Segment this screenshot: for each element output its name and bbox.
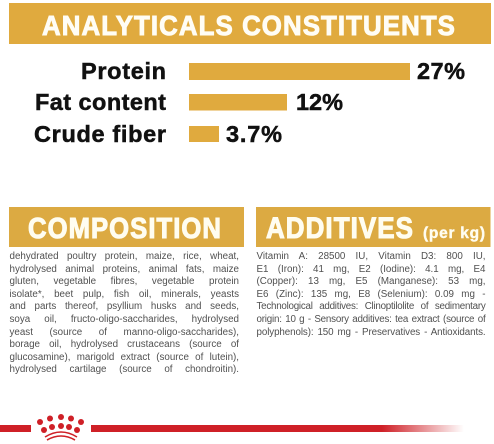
composition text: hydrolysed animal proteins, animal fats, maize [10, 264, 239, 275]
additives text: Technological additives: Clinoptilolite of sedimentary [256, 301, 486, 312]
additives text: E1 (Iron): 41 mg, E2 (Iodine): 4.1 mg, E4 [256, 264, 486, 275]
composition banner: COMPOSITION [28, 213, 222, 245]
additives text: polyphenols): 150 mg - Preservatives - Antioxidants. [256, 327, 486, 338]
row: crude fiber: 3.7% [226, 121, 282, 147]
additives text [256, 251, 486, 338]
red footer line [0, 425, 464, 432]
row: protein [81, 58, 465, 84]
row: fat content [35, 89, 343, 115]
additives text: E6 (Zinc): 135 mg, E8 (Selenium): 0.09 mg - [256, 289, 486, 300]
row: fat content: Fat content [35, 89, 166, 115]
additives banner [256, 207, 490, 247]
title banner: ANALYTICALS CONSTITUENTS [42, 10, 456, 41]
row: protein: Protein [81, 58, 166, 84]
composition text [10, 251, 239, 375]
row: crude fiber [34, 121, 282, 147]
composition text: soya oil, fructo-oligo-saccharides, hydrolysed [10, 314, 239, 325]
icon: crown logo [37, 414, 84, 440]
composition text: glucosamine), marigold extract (source of lutein), [10, 352, 239, 363]
composition text: isolate*, beet pulp, fish oil, minerals, yeasts [10, 289, 239, 300]
additives banner: ADDITIVES [266, 212, 414, 245]
composition text: dehydrated poultry protein, maize, rice, wheat, [10, 251, 239, 262]
row: fat content: 12% [296, 89, 343, 115]
additives text: (Copper): 13 mg, E5 (Manganese): 53 mg, [256, 276, 486, 287]
additives text: Vitamin A: 28500 IU, Vitamin D3: 800 IU, [256, 251, 486, 262]
bar chart: analytical constituents [34, 58, 465, 147]
composition text: gluten, vegetable fibres, vegetable protein [10, 276, 239, 287]
additives text: origin: 10 g - Sensory additives: tea extract (source of [256, 314, 486, 325]
row: crude fiber: Crude fiber [34, 121, 166, 147]
composition text: borage oil, hydrolysed crustaceans (source of [10, 339, 239, 350]
composition text: yeast (source of manno-oligo-saccharides), [10, 327, 239, 338]
additives banner: (per kg) [423, 225, 485, 242]
composition text: hydrolysed cartilage (source of chondroitin). [10, 364, 239, 375]
row: protein: 27% [417, 58, 465, 84]
composition text: and parts thereof, psyllium husks and seeds, [10, 301, 239, 312]
